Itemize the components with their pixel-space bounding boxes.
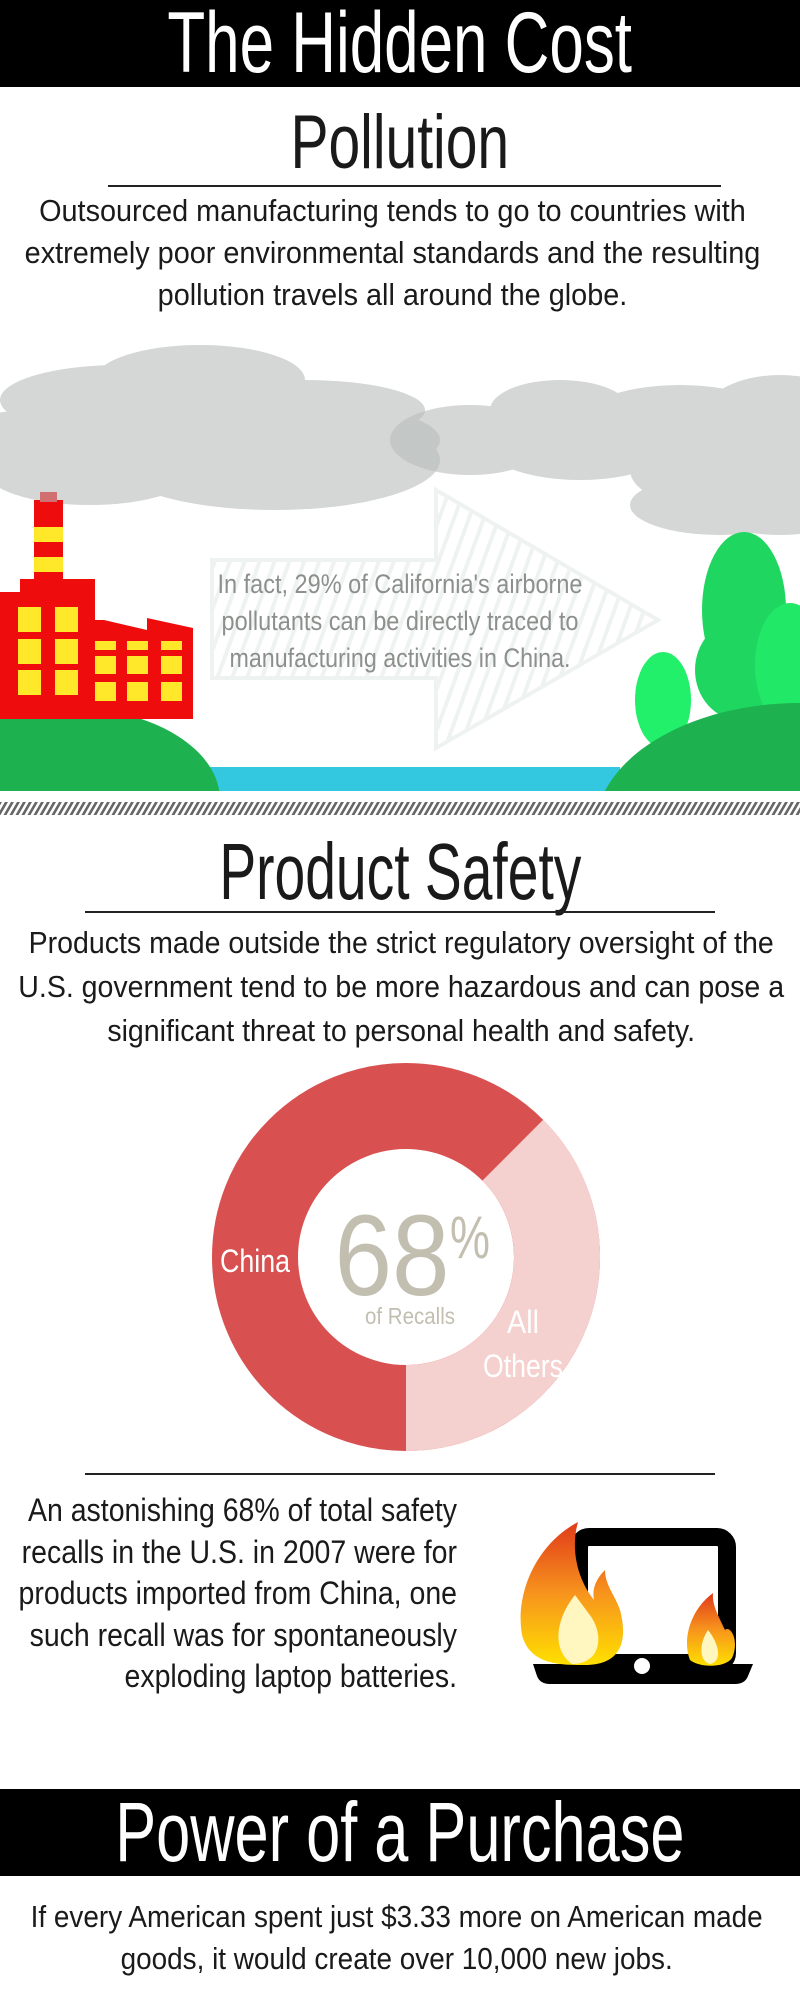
pollution paragraph: extremely poor environmental standards and the resulting: [24, 235, 760, 270]
arrow: [212, 490, 658, 748]
donut chart: All: [507, 1304, 539, 1340]
pollution paragraph: [24, 193, 760, 312]
recall text: such recall was for spontaneously: [30, 1616, 457, 1652]
underline safety: [85, 911, 715, 913]
arrow text: In fact, 29% of California's airborne: [218, 569, 582, 599]
icon: burning laptop: [520, 1522, 753, 1684]
underline recall: [85, 1473, 715, 1475]
arrow text: pollutants can be directly traced to: [222, 606, 578, 636]
purchase text: If every American spent just $3.33 more on American made: [31, 1899, 763, 1934]
pollution paragraph: Outsourced manufacturing tends to go to countries with: [39, 193, 745, 228]
title bar: [0, 0, 800, 87]
safety paragraph: U.S. government tend to be more hazardous and can pose a: [18, 969, 784, 1004]
purchase text: goods, it would create over 10,000 new jobs.: [121, 1941, 673, 1976]
donut chart: of Recalls: [365, 1303, 455, 1329]
power of a purchase bar: [0, 1789, 800, 1876]
left hill: [0, 708, 220, 892]
power of a purchase bar: Power of a Purchase: [115, 1785, 685, 1879]
safety paragraph: Products made outside the strict regulatory oversight of the: [29, 925, 774, 960]
water: [200, 767, 620, 791]
pollution paragraph: pollution travels all around the globe.: [157, 277, 627, 312]
donut chart: Others: [483, 1348, 563, 1384]
donut chart: %: [450, 1204, 490, 1271]
recall text: An astonishing 68% of total safety: [28, 1492, 457, 1528]
clouds right: [390, 375, 800, 535]
clouds left: [0, 345, 440, 510]
right hill: [595, 703, 800, 957]
pollution illustration: [0, 345, 800, 815]
underline pollution: [108, 185, 721, 187]
donut chart: 68: [334, 1192, 450, 1320]
donut chart: [212, 1063, 600, 1451]
recall text: exploding laptop batteries.: [125, 1658, 457, 1694]
heading: product safety: Product Safety: [219, 827, 581, 916]
safety paragraph: [18, 925, 784, 1048]
trees: [635, 532, 800, 748]
heading: pollution: Pollution: [291, 100, 509, 185]
arrow text: [218, 569, 582, 673]
donut chart: China: [220, 1243, 290, 1279]
safety paragraph: significant threat to personal health and safety.: [107, 1013, 695, 1048]
purchase text: [31, 1899, 763, 1976]
recall text: [19, 1492, 457, 1694]
arrow text: manufacturing activities in China.: [230, 643, 570, 673]
recall text: products imported from China, one: [19, 1575, 457, 1611]
factory: [0, 492, 193, 719]
recall text: recalls in the U.S. in 2007 were for: [22, 1534, 457, 1570]
